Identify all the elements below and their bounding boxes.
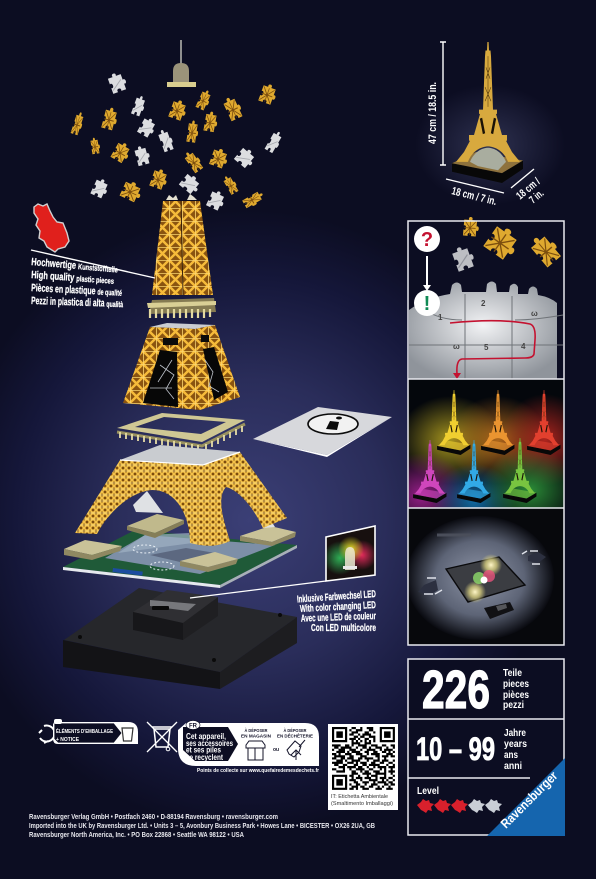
callout: quality pieces <box>31 204 155 310</box>
footer addresses: Ravensburger North America, Inc. • PO Box 22868 • Seattle WA 98122 • USA <box>29 830 244 839</box>
logo: Ravensburger: Ravensburger <box>498 768 560 831</box>
LED inset image <box>323 526 377 581</box>
label: collection points FR: Points de collecte sur www.quefairedemesdechets.fr <box>197 768 320 774</box>
icon: exclamation mark <box>414 290 440 316</box>
callout text: LED <box>297 589 376 634</box>
label: collection points FR <box>178 720 320 774</box>
label: collection points FR: À DÉPOSER <box>284 726 307 734</box>
age range: years <box>504 739 527 750</box>
dimensions diagram: 18 cm / 7 in. <box>450 185 498 208</box>
puzzle dome with numbered order: ω <box>453 342 460 351</box>
age range: ans <box>504 750 518 761</box>
label: collection points FR: EN MAGASIN <box>241 734 272 740</box>
footer addresses <box>29 812 375 839</box>
age range: 10 – 99 <box>416 731 495 767</box>
puzzle dome with numbered order: ω <box>531 309 538 318</box>
label: collection points FR: se recyclent <box>186 753 223 762</box>
puzzle dome with numbered order: 5 <box>484 343 489 352</box>
square frame <box>117 413 245 451</box>
label: collection points FR: ou <box>273 747 279 753</box>
tower middle section <box>123 323 240 410</box>
callout text: quality pieces: High quality plastic pieces <box>31 269 115 287</box>
dimensions diagram <box>427 42 546 208</box>
puzzle dome with numbered order: 1 <box>438 313 443 322</box>
panel borders <box>408 221 564 645</box>
puzzle dome with numbered order: 2 <box>481 299 486 308</box>
callout text: quality pieces <box>31 256 124 310</box>
panel: assembly order <box>408 216 564 379</box>
label: collection points FR: et ses piles <box>186 746 221 754</box>
difficulty level: Level <box>417 786 439 797</box>
illuminated base <box>63 588 297 689</box>
callout text: quality pieces: Hochwertige Kunststoffteile <box>31 256 119 276</box>
label: collection points FR: ses accessoires <box>186 739 233 748</box>
icon: question mark: ? <box>421 229 433 251</box>
label: packaging recycling: ÉLÉMENTS D'EMBALLAGE <box>56 727 113 735</box>
label: collection points FR: À DÉPOSER <box>244 726 268 734</box>
panel: LED close-up <box>406 508 564 645</box>
label: packaging recycling: + NOTICE <box>56 737 79 743</box>
callout text: LED: Inklusive Farbwechsel LED <box>297 589 376 606</box>
loose pieces <box>451 216 563 272</box>
icon: red puzzle piece <box>34 204 69 252</box>
piece count: pieces <box>503 679 529 690</box>
info box: pieces, age, level <box>408 659 565 836</box>
callout text: quality pieces: Pièces en plastique de qualité <box>31 282 123 299</box>
QR code with label: IT: Etichetta Ambientale <box>331 794 388 800</box>
circuit board <box>63 530 297 588</box>
dimensions diagram: 7 in. <box>527 187 546 206</box>
piece count: pezzi <box>503 700 524 711</box>
callout text: LED: Con LED multicolore <box>311 623 376 634</box>
icon: question mark <box>414 226 440 252</box>
callout text: LED: With color changing LED <box>300 600 376 615</box>
QR code with label <box>328 724 398 810</box>
age range: Jahre <box>504 728 526 739</box>
tower spire cap <box>167 40 196 87</box>
piece count: Teile <box>503 668 522 679</box>
tower top section <box>152 194 213 295</box>
icon: triman recycling <box>39 726 55 743</box>
label: collection points FR: FR <box>189 724 198 730</box>
difficulty level <box>417 786 502 813</box>
callout text: LED: Avec une LED de couleur <box>301 611 376 625</box>
callout text: quality pieces: Pezzi in plastica di alta qualità <box>31 295 124 310</box>
label: packaging recycling <box>53 719 138 744</box>
panel: colour towers <box>408 380 564 508</box>
label: collection points FR: Cet appareil, <box>186 732 226 741</box>
arrow <box>423 256 431 291</box>
flying puzzle pieces <box>71 70 285 212</box>
icon: crossed-out bin <box>147 722 177 752</box>
QR code with label: (Smaltimento Imballaggi) <box>331 801 393 807</box>
instruction sheet <box>253 407 392 457</box>
puzzle dome with numbered order <box>409 282 563 379</box>
gold tower <box>452 42 523 183</box>
age range: anni <box>504 761 522 772</box>
piece count: 226 <box>422 660 490 720</box>
puzzle dome with numbered order: 4 <box>521 342 526 351</box>
LED housings <box>64 514 296 572</box>
footer addresses: Imported into the UK by Ravensburger Ltd. • Units 3 – 5, Avonbury Business Park • Howes Lane • BICESTER • OX26 2UA, GB <box>29 821 375 830</box>
label: collection points FR: EN DÉCHÈTERIE <box>277 732 314 740</box>
footer addresses: Ravensburger Verlag GmbH • Postfach 2460 • D-88194 Ravensburg • ravensburger.com <box>29 812 278 821</box>
dimensions diagram: 47 cm / 18.5 in. <box>427 82 439 144</box>
tower lower section with arches <box>75 445 287 546</box>
platform 2 <box>147 298 216 318</box>
dimensions diagram: 18 cm / <box>514 176 543 202</box>
callout: colour changing LED <box>190 526 377 634</box>
icon: exclamation mark: ! <box>424 293 430 315</box>
piece count: pièces <box>503 690 529 701</box>
